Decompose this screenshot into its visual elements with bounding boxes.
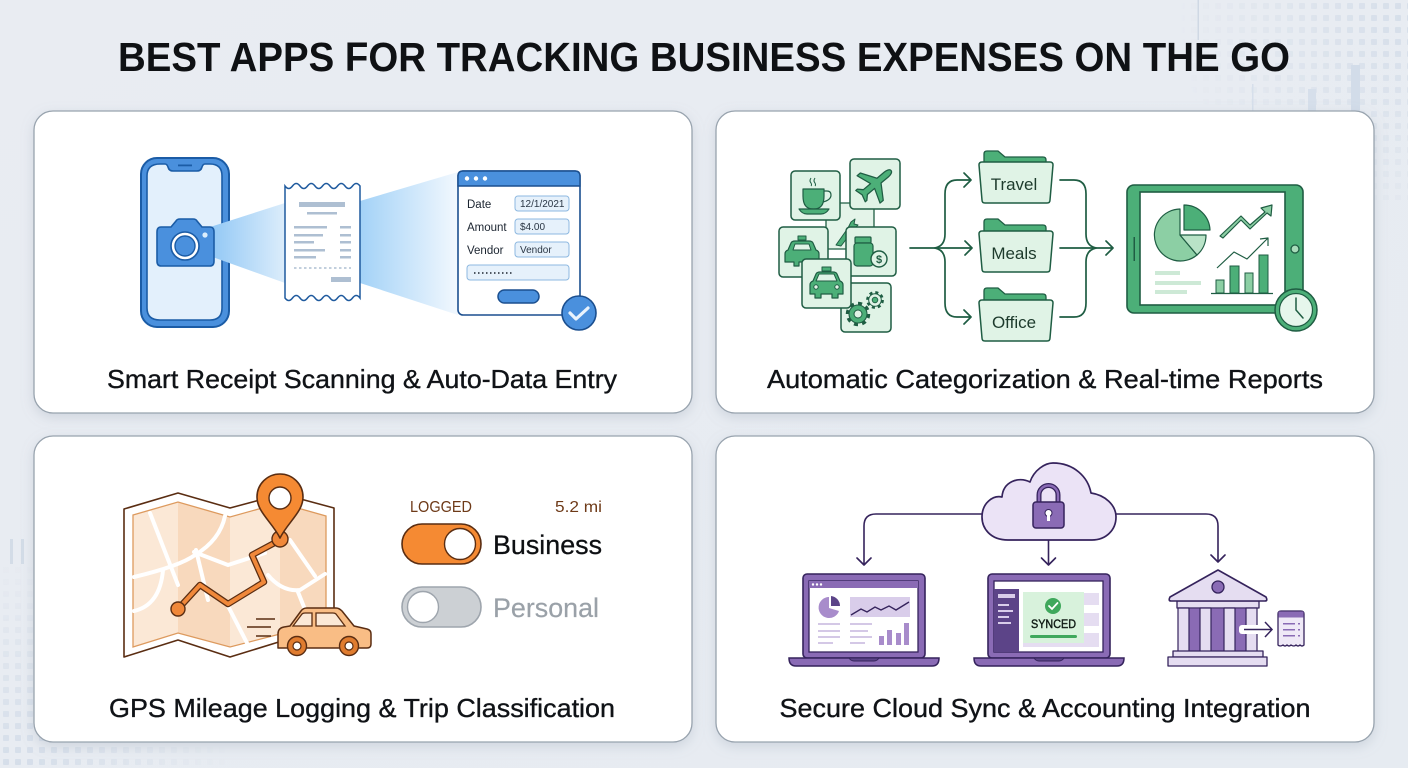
icon: clock xyxy=(1275,289,1317,331)
icon: laptop dashboard xyxy=(789,574,939,666)
panel: automatic categorization xyxy=(716,111,1374,413)
folder: travel xyxy=(979,151,1053,203)
title: BEST APPS FOR TRACKING BUSINESS EXPENSES ON THE GO xyxy=(118,34,1290,80)
tile: gears xyxy=(841,283,891,332)
toggle: business on xyxy=(402,524,481,564)
form window: Amount xyxy=(467,222,507,234)
panel: secure cloud sync xyxy=(716,436,1374,742)
panel 1 card xyxy=(34,111,692,413)
form window: Vendor xyxy=(520,245,552,256)
icon: phone xyxy=(141,158,229,327)
scan beam from phone to receipt xyxy=(207,203,285,283)
icon: cloud with lock xyxy=(982,463,1116,540)
business label: Business xyxy=(493,530,602,560)
arrows into folders xyxy=(910,173,972,324)
folder: office xyxy=(979,288,1053,341)
tile: plane xyxy=(849,157,903,210)
panel 4 card xyxy=(716,436,1374,742)
folder: meals: Meals xyxy=(991,244,1037,263)
icon: receipt xyxy=(285,184,360,300)
icon: laptop synced xyxy=(974,574,1124,666)
tile: taxi back xyxy=(779,227,828,277)
panel 2 card xyxy=(716,111,1374,413)
icon: location pin xyxy=(257,474,303,538)
form window: $4.00 xyxy=(520,222,545,233)
panel 3 card xyxy=(34,436,692,742)
icon: car xyxy=(247,608,371,656)
synced status: SYNCED xyxy=(1031,617,1076,631)
pie chart xyxy=(1154,205,1210,261)
tile: jar and dollar xyxy=(846,227,896,276)
folder: office: Office xyxy=(992,313,1036,332)
folder: travel: Travel xyxy=(991,175,1037,194)
icon: small receipt xyxy=(1278,611,1304,646)
tile: jar and dollar: $ xyxy=(876,254,882,266)
panel 4 label: Secure Cloud Sync & Accounting Integration xyxy=(780,693,1310,723)
trend arrows xyxy=(1217,205,1272,268)
route line xyxy=(171,531,288,616)
arrows out of folders xyxy=(1060,180,1113,317)
form window xyxy=(458,171,580,315)
icon: bank xyxy=(1168,570,1267,666)
personal label: Personal xyxy=(493,593,599,623)
logged label: LOGGED xyxy=(410,499,472,516)
mileage value: 5.2 mi xyxy=(555,499,602,516)
bank export arrow xyxy=(1239,622,1272,637)
scan beam from receipt to form xyxy=(360,172,458,315)
icon: camera xyxy=(157,219,214,266)
bar chart xyxy=(1211,255,1273,294)
form window: Date xyxy=(467,199,491,211)
icon: folded map xyxy=(124,493,334,657)
folder: meals xyxy=(979,219,1053,272)
form window: Vendor xyxy=(467,245,504,257)
synced status xyxy=(1023,592,1084,643)
panel: gps mileage logging xyxy=(34,436,692,742)
panel 1 label: Smart Receipt Scanning & Auto-Data Entry xyxy=(107,364,617,394)
panel 3 label: GPS Mileage Logging & Trip Classification xyxy=(109,693,615,723)
icon: tablet report xyxy=(1127,185,1303,313)
panel 2 label: Automatic Categorization & Real-time Reports xyxy=(767,364,1323,394)
tile: taxi front xyxy=(802,259,851,308)
panel: smart receipt scanning xyxy=(34,111,692,413)
toggle: personal off xyxy=(402,587,481,627)
tile: coffee xyxy=(791,171,840,220)
icon: check badge xyxy=(562,296,596,330)
sync arrows xyxy=(857,514,1225,565)
expense icon tiles xyxy=(779,157,903,332)
form window: 12/1/2021 xyxy=(520,199,565,210)
